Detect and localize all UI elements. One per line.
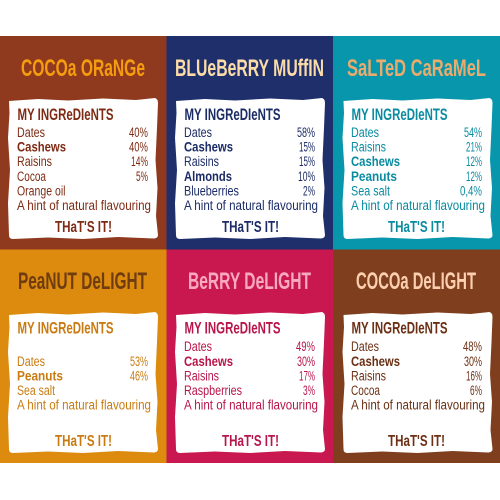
ingredient list [17, 125, 151, 213]
white ingredients card [342, 312, 492, 453]
ingredient list: 16% [466, 368, 482, 384]
ingredient list: 3% [303, 383, 315, 398]
ingredient list: Cashews [351, 354, 400, 369]
ingredient list: 49% [296, 339, 315, 354]
ingredient list: Sea salt [351, 184, 390, 198]
ingredient list: 12% [466, 154, 482, 169]
ingredient list: Almonds [184, 169, 232, 184]
ingredient list: 17% [299, 368, 315, 384]
title: Peanut Delight: PeaNUT DeLIGHT [18, 268, 147, 295]
ingredient list: Raisins [184, 368, 219, 384]
title: Cocoa Orange: COCOa ORaNGe [21, 55, 145, 82]
ingredient list: Raisins [351, 140, 386, 154]
ingredient list: Dates [351, 339, 379, 354]
ingredient list: 40% [129, 125, 148, 140]
ingredient list: Peanuts [17, 368, 63, 384]
ingredient list: Blueberries [184, 184, 239, 198]
ingredient list: 15% [299, 154, 315, 169]
ingredient list: Cocoa [17, 169, 46, 184]
ingredient list: 40% [129, 140, 148, 154]
closing line: That's it: THaT'S IT! [55, 433, 112, 450]
ingredient list: 2% [303, 184, 315, 198]
ingredient list [184, 339, 318, 412]
ingredient list: Raspberries [184, 383, 242, 398]
ingredient list: Dates [17, 354, 45, 369]
ingredient list: 46% [130, 368, 148, 384]
ingredient list: 15% [299, 140, 315, 154]
ingredient list: 58% [297, 125, 315, 140]
white ingredients card [8, 312, 158, 453]
closing line: That's it: THaT'S IT! [388, 433, 445, 450]
closing line: That's it: THaT'S IT! [222, 219, 279, 236]
title: Berry Delight: BeRRY DeLIGHT [188, 268, 311, 295]
heading: My ingredients: MY INGReDIeNTS [184, 106, 280, 124]
ingredient list: 14% [131, 154, 148, 169]
ingredient list: Peanuts [351, 169, 397, 184]
ingredient list: Raisins [351, 368, 386, 384]
ingredient list: Dates [184, 125, 212, 140]
panel: Berry Delight [166, 250, 333, 463]
panel: Cocoa Orange [0, 36, 166, 250]
heading: My ingredients: MY INGReDIeNTS [18, 320, 114, 338]
white ingredients card [175, 312, 325, 453]
heading: My ingredients: MY INGReDIeNTS [352, 320, 448, 338]
ingredient list: Dates [17, 125, 45, 140]
heading: My ingredients: MY INGReDIeNTS [184, 320, 280, 338]
ingredient list: A hint of natural flavouring [184, 198, 318, 213]
ingredient list: Sea salt [17, 383, 55, 398]
ingredient list: 48% [463, 339, 482, 354]
ingredient list [184, 125, 318, 213]
panel: Blueberry Muffin [166, 36, 333, 250]
ingredient list: Dates [351, 125, 379, 140]
ingredient list: 6% [470, 383, 482, 398]
ingredient list: 54% [464, 125, 482, 140]
ingredient list: 12% [466, 169, 482, 184]
ingredient list [351, 339, 485, 412]
white ingredients card [342, 98, 492, 239]
ingredient list: Cashews [184, 354, 233, 369]
ingredient list: Raisins [17, 154, 52, 169]
white ingredients card [8, 98, 158, 239]
ingredient list: Cashews [351, 154, 400, 169]
heading: My ingredients: MY INGReDIeNTS [18, 106, 114, 124]
closing line: That's it: THaT'S IT! [388, 219, 445, 236]
ingredient list: 53% [130, 354, 148, 369]
ingredient list: Dates [184, 339, 212, 354]
heading: My ingredients: MY INGReDIeNTS [352, 106, 448, 124]
ingredient list: A hint of natural flavouring [17, 198, 151, 213]
ingredient list: A hint of natural flavouring [17, 398, 151, 412]
closing line: That's it: THaT'S IT! [55, 219, 112, 236]
ingredient list: Cocoa [351, 383, 380, 398]
ingredient list: Orange oil [17, 184, 66, 198]
title: Blueberry Muffin: BLUeBeRRY MUffIN [175, 55, 324, 82]
white ingredients card [175, 98, 325, 239]
ingredient list: 10% [298, 169, 315, 184]
ingredient list: 5% [136, 169, 148, 184]
ingredient list: 30% [297, 354, 315, 369]
ingredient list [17, 354, 151, 412]
closing line: That's it: THaT'S IT! [222, 433, 279, 450]
ingredient list [351, 125, 485, 213]
panel: Cocoa Delight [333, 250, 500, 463]
ingredient list: 0,4% [460, 184, 482, 198]
ingredient list: 21% [466, 140, 482, 154]
ingredient list: Cashews [184, 140, 233, 154]
ingredient list: Raisins [184, 154, 219, 169]
panel: Peanut Delight [0, 250, 166, 463]
ingredient list: 30% [464, 354, 482, 369]
ingredient list: Cashews [17, 140, 66, 154]
ingredient list: A hint of natural flavouring [184, 398, 318, 412]
panel: Salted Caramel [333, 36, 500, 250]
